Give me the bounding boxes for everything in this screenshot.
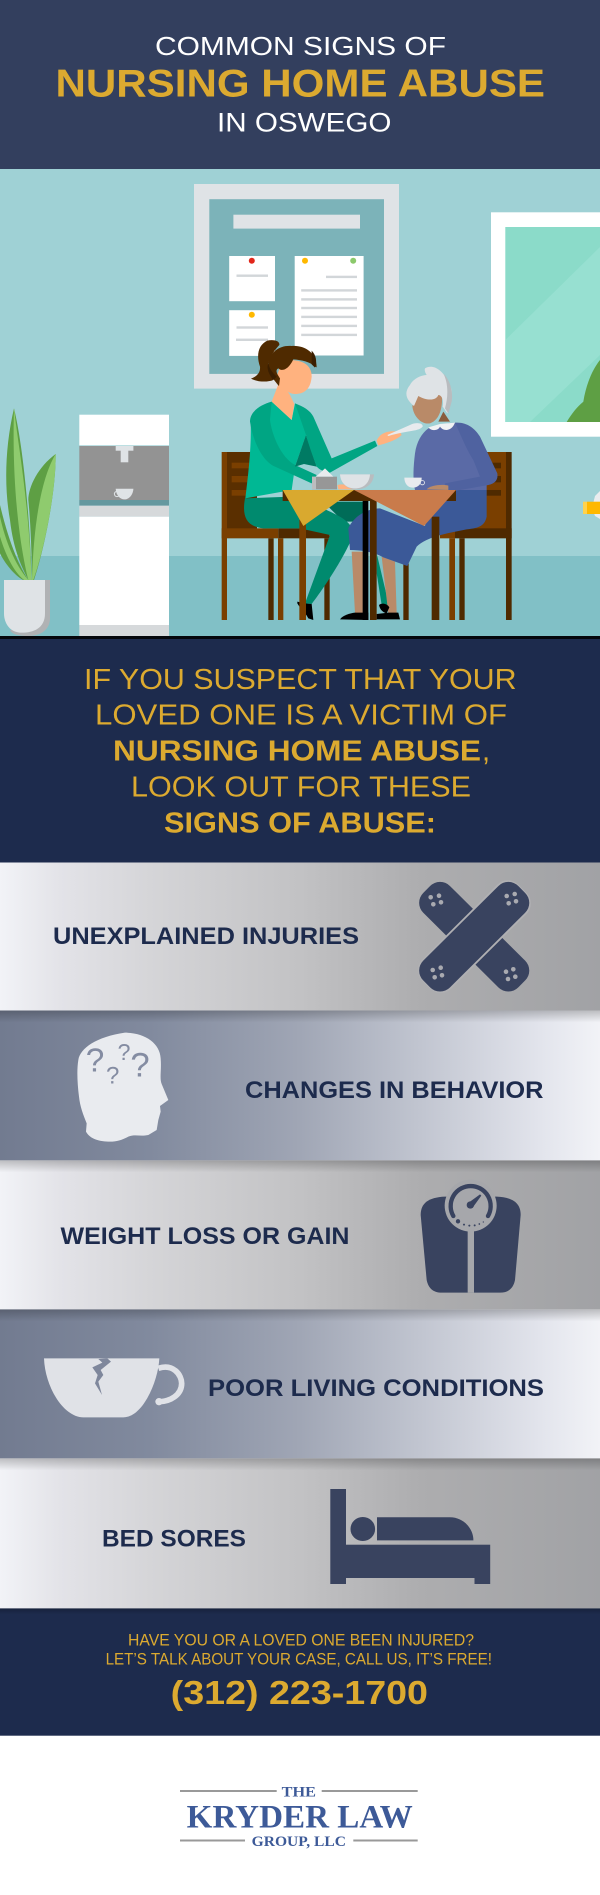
intro text: LOOK OUT FOR THESE — [131, 772, 471, 804]
panel: call to action footer — [0, 1608, 600, 1736]
icon: head with question marks: ? — [106, 1062, 119, 1089]
logo: The Kryder Law Group: KRYDER LAW — [187, 1799, 413, 1835]
phone number: (312) 223-1700 — [171, 1674, 428, 1711]
icon: bathroom scale — [421, 1180, 521, 1293]
logo: The Kryder Law Group: THE — [282, 1785, 316, 1801]
icon: head with question marks: ? — [130, 1047, 150, 1085]
object at right edge — [583, 491, 600, 519]
icon: head with question marks: ? — [118, 1039, 131, 1065]
elderly resident — [340, 367, 498, 620]
nurse — [244, 340, 402, 620]
call to action text: HAVE YOU OR A LOVED ONE BEEN INJURED? — [128, 1632, 474, 1650]
intro text: IF YOU SUSPECT THAT YOUR — [84, 664, 517, 696]
panel: title header — [0, 0, 600, 169]
intro text — [84, 664, 517, 840]
label: BED SORES — [102, 1526, 246, 1553]
dining scene: nurse feeding resident at a table — [222, 340, 512, 620]
panel: unexplained injuries — [0, 862, 600, 1010]
icon: head with question marks — [77, 1033, 168, 1142]
right chair — [403, 452, 512, 620]
water cooler — [79, 415, 169, 637]
intro text: , — [482, 735, 490, 767]
icon: cracked cup — [44, 1358, 182, 1417]
panel: poor living conditions — [0, 1309, 600, 1458]
label: POOR LIVING CONDITIONS — [208, 1375, 544, 1402]
panel: changes in behavior — [0, 1010, 600, 1160]
heading line: common signs of: COMMON SIGNS OF — [155, 31, 446, 61]
heading line: in Oswego: IN OSWEGO — [217, 107, 392, 137]
icon: person in bed — [330, 1489, 490, 1584]
heading line: nursing home abuse: NURSING HOME ABUSE — [56, 63, 545, 106]
logo: The Kryder Law Group — [180, 1785, 418, 1850]
panel: bed sores — [0, 1458, 600, 1608]
intro text: NURSING HOME ABUSE — [113, 735, 481, 767]
napkin box, bowl and cup — [312, 468, 424, 489]
potted plant — [0, 408, 56, 636]
panel: intro statement — [0, 639, 600, 862]
icon: head with question marks: ? — [86, 1043, 104, 1080]
label: CHANGES IN BEHAVIOR — [245, 1077, 544, 1104]
spoon — [387, 423, 423, 436]
label: WEIGHT LOSS OR GAIN — [60, 1223, 350, 1250]
left chair — [222, 452, 330, 620]
icon: crossed bandages — [411, 874, 537, 999]
intro text: SIGNS OF ABUSE: — [164, 808, 436, 840]
noticeboard — [194, 184, 399, 389]
table with tablecloths — [283, 490, 456, 620]
window — [491, 212, 600, 437]
panel: weight loss or gain — [0, 1160, 600, 1309]
call to action text line two: LET’S TALK ABOUT YOUR CASE, CALL US, IT’S FREE! — [106, 1650, 492, 1668]
label: UNEXPLAINED INJURIES — [53, 923, 359, 950]
panel: nursing home illustration — [0, 169, 600, 639]
logo: The Kryder Law Group: GROUP, LLC — [252, 1834, 346, 1850]
intro text: LOVED ONE IS A VICTIM OF — [95, 700, 507, 732]
